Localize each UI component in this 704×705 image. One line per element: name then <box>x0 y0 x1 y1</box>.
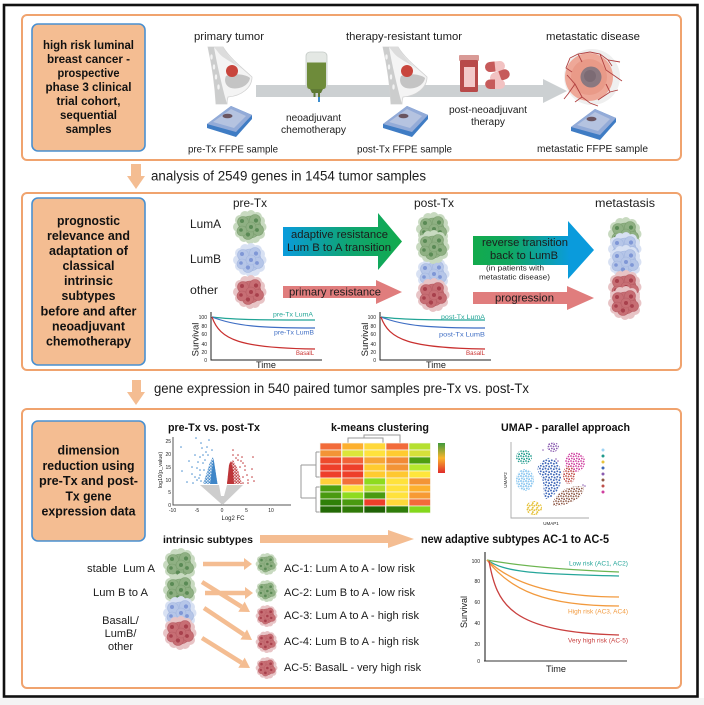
text box: study cohort: high risk luminal <box>43 38 134 52</box>
note: in patients with metastatic disease: metastatic disease) <box>479 272 551 282</box>
chart: UMAP <box>503 442 604 526</box>
arrow: progression: progression <box>495 292 554 304</box>
cell clusters: post-Tx <box>416 212 450 312</box>
chart: pre-Tx survival: Time <box>256 360 276 370</box>
chart: post-Tx survival: 60 <box>370 332 376 338</box>
chart: pre-Tx survival: 40 <box>201 342 207 348</box>
heading: pre-Tx vs. post-Tx: pre-Tx vs. post-Tx <box>168 422 261 434</box>
chart: post-Tx survival: BasalL <box>466 351 486 357</box>
label: neoadjuvant chemotherapy: chemotherapy <box>281 125 346 136</box>
cell clusters: intrinsic subtypes stack <box>163 548 196 650</box>
label: stable Lum A: stable Lum A <box>87 563 156 575</box>
icon: metastatic tumor <box>564 49 622 106</box>
chart: pre-Tx survival: pre-Tx LumA <box>273 312 314 318</box>
text box: dimension reduction: pre-Tx and post- <box>39 474 138 488</box>
text box: study cohort: prospective <box>58 66 120 80</box>
text box: dimension reduction: Tx gene <box>66 490 112 504</box>
chart: adaptive subtype survival: Low risk (AC1, AC2) <box>569 560 628 568</box>
arrow: adaptive resistance: Lum B to A transition <box>287 242 391 254</box>
arrow: adaptive resistance <box>283 213 402 270</box>
text box: study cohort: phase 3 clinical <box>46 80 132 94</box>
arrow: reverse transition: reverse transition <box>482 237 568 249</box>
label: post-Tx FFPE sample: post-Tx FFPE sample <box>357 144 453 156</box>
text box: study cohort: trial cohort, <box>56 94 120 108</box>
label: BasalL/LumB/other: other <box>108 641 133 653</box>
chart: k-means heatmap <box>301 435 445 513</box>
arrow: reverse transition <box>473 221 594 279</box>
text box: prognostic relevance: intrinsic <box>64 274 113 288</box>
arrow: step 2 to step 3 <box>127 380 145 405</box>
chart: volcano plot: -5 <box>195 508 199 514</box>
label: AC-5: AC-5: BasalL - very high risk <box>284 662 421 674</box>
chart: volcano plot: 5 <box>245 508 248 514</box>
text box: study cohort: samples <box>66 122 112 136</box>
icon: metastatic FFPE block <box>571 109 616 140</box>
chart: post-Tx survival: 100 <box>368 315 376 321</box>
arrow: progression <box>473 286 594 310</box>
text box: prognostic relevance: classical <box>62 259 114 273</box>
label: other: other <box>190 283 218 297</box>
text box: study cohort <box>32 24 145 151</box>
arrow: step 1 to step 2 <box>127 164 145 189</box>
chart: volcano plot: 15 <box>165 465 171 471</box>
chart: volcano plot <box>158 437 291 522</box>
chart: pre-Tx survival <box>190 312 322 370</box>
note: in patients with metastatic disease: (in patients with <box>486 264 544 272</box>
text box: prognostic relevance: adaptation of <box>49 244 129 258</box>
icons: adaptive subtype clusters <box>256 553 277 679</box>
chart: UMAP: UMAP1 <box>543 521 559 526</box>
chart: post-Tx survival: Time <box>426 360 446 370</box>
chart: adaptive subtype survival: 0 <box>477 659 480 665</box>
text box: prognostic relevance <box>32 198 145 365</box>
chart: post-Tx survival: 80 <box>370 324 376 330</box>
chart: volcano plot: 5 <box>168 490 171 496</box>
label: metastatic FFPE sample: metastatic FFPE sample <box>537 144 649 155</box>
label: AC-2: AC-2: Lum B to A - low risk <box>284 587 415 599</box>
chart: adaptive subtype survival: 20 <box>474 642 480 648</box>
label: Lum B to A: Lum B to A <box>93 587 149 599</box>
arrow: treatment timeline <box>256 79 567 103</box>
label: BasalL/LumB/other: BasalL/ <box>102 615 140 627</box>
text box: prognostic relevance: subtypes <box>62 289 116 303</box>
chart: UMAP: UMAP2 <box>503 472 508 488</box>
caption: gene expression in paired samples: gene expression in 540 paired tumor samples pre-Tx vs. post-Tx <box>154 381 529 396</box>
label: pre-Tx FFPE sample: pre-Tx FFPE sample <box>188 144 279 156</box>
chart: adaptive subtype survival <box>459 552 628 674</box>
icon: therapy-resistant tumor breast <box>383 47 427 104</box>
arrow: intrinsic to adaptive subtypes <box>260 530 414 548</box>
chart: post-Tx survival: 20 <box>370 350 376 356</box>
heading: metastasis: metastasis <box>595 196 655 210</box>
chart: volcano plot: 0 <box>221 508 224 514</box>
cell clusters: metastasis <box>608 217 642 320</box>
heading: pre-Tx: pre-Tx <box>233 196 267 210</box>
label: BasalL/LumB/other: LumB/ <box>105 628 137 640</box>
arrow: primary resistance: primary resistance <box>289 286 381 298</box>
cell clusters: pre-Tx <box>233 210 266 309</box>
panel: intrinsic subtypes <box>22 193 681 370</box>
icon: pre-Tx FFPE block <box>207 106 252 137</box>
icon: primary tumor breast <box>208 47 252 104</box>
text box: prognostic relevance: neoadjuvant <box>52 320 126 334</box>
chart: pre-Tx survival: BasalL <box>296 351 315 357</box>
label: AC-1: AC-1: Lum A to A - low risk <box>284 563 416 575</box>
chart: adaptive subtype survival: Time <box>546 664 566 674</box>
label: neoadjuvant chemotherapy: neoadjuvant <box>286 113 341 124</box>
label: post-neoadjuvant therapy: post-neoadjuvant <box>449 105 527 116</box>
text box: study cohort: sequential <box>60 108 117 122</box>
arrow: reverse transition: back to LumB <box>490 250 558 262</box>
chart: pre-Tx survival: Survival <box>190 323 202 356</box>
chart: volcano plot: 10 <box>268 508 274 514</box>
chart: volcano plot: -10 <box>169 508 176 514</box>
heading: UMAP - parallel approach: UMAP - parallel approach <box>501 422 630 434</box>
chart: adaptive subtype survival: 80 <box>474 579 480 585</box>
text box: dimension reduction: dimension <box>58 444 120 458</box>
icon: post-Tx FFPE block <box>383 106 428 137</box>
caption: analysis of genes: analysis of 2549 genes in 1454 tumor samples <box>151 168 426 184</box>
heading: new adaptive subtypes: new adaptive subtypes AC-1 to AC-5 <box>421 534 610 546</box>
chart: pre-Tx survival: 100 <box>199 315 207 321</box>
arrows: subtype mapping <box>202 558 253 668</box>
text box: dimension reduction: reduction using <box>42 459 134 473</box>
chart: volcano plot: 20 <box>165 452 171 458</box>
label: therapy-resistant tumor: therapy-resistant tumor <box>346 31 462 43</box>
chart: post-Tx survival: post-Tx LumB <box>439 332 485 338</box>
chart: adaptive subtype survival: High risk (AC3, AC4) <box>568 608 628 616</box>
icon: chemotherapy IV bag <box>306 52 327 102</box>
text box: study cohort: breast cancer - <box>47 52 130 66</box>
label: LumA: LumA <box>190 217 221 231</box>
chart: adaptive subtype survival: Very high risk (AC-5) <box>568 638 628 644</box>
chart: adaptive subtype survival: Survival <box>459 596 469 628</box>
chart: volcano plot: 25 <box>165 439 171 445</box>
chart: adaptive subtype survival: 60 <box>474 600 480 606</box>
chart: post-Tx survival: 0 <box>373 358 376 364</box>
text box: prognostic relevance: chemotherapy <box>46 334 131 348</box>
label: metastatic disease: metastatic disease <box>546 31 640 43</box>
chart: pre-Tx survival: 80 <box>201 324 207 330</box>
chart: pre-Tx survival: pre-Tx LumB <box>274 330 314 336</box>
label: neoadjuvant chemotherapy <box>281 113 346 136</box>
chart: pre-Tx survival: 0 <box>204 358 207 364</box>
icon: medication bottle and pills <box>459 55 511 92</box>
text box: dimension reduction: expression data <box>42 504 137 518</box>
text box: prognostic relevance: relevance and <box>47 229 130 243</box>
label: post-neoadjuvant therapy: therapy <box>471 117 505 128</box>
arrow: primary resistance <box>283 280 402 304</box>
panel: dimension reduction <box>22 409 681 688</box>
text box: dimension reduction <box>32 421 145 541</box>
label: post-neoadjuvant therapy <box>449 105 527 128</box>
chart: adaptive subtype survival: 100 <box>472 559 480 565</box>
arrow: adaptive resistance: adaptive resistance <box>291 229 388 241</box>
label: LumB: LumB <box>190 252 221 266</box>
label: BasalL/LumB/other <box>102 615 140 653</box>
chart: post-Tx survival <box>360 312 491 370</box>
note: in patients with metastatic disease <box>479 264 551 282</box>
chart: volcano plot: 10 <box>165 478 171 484</box>
chart: pre-Tx survival: 60 <box>201 332 207 338</box>
panel: study design <box>22 15 681 160</box>
heading: intrinsic subtypes: intrinsic subtypes <box>163 534 253 546</box>
heading: k-means clustering: k-means clustering <box>331 422 429 434</box>
label: AC-4: AC-4: Lum B to A - high risk <box>284 636 419 648</box>
chart: volcano plot: Log2 FC <box>221 516 245 522</box>
chart: post-Tx survival: 40 <box>370 342 376 348</box>
chart: volcano plot: log10(p_value) <box>158 452 164 488</box>
text box: prognostic relevance: prognostic <box>57 214 120 228</box>
chart: volcano plot: 0 <box>168 503 171 509</box>
heading: post-Tx: post-Tx <box>414 196 454 210</box>
text box: prognostic relevance: before and after <box>40 304 137 318</box>
label: AC-3: AC-3: Lum A to A - high risk <box>284 610 419 622</box>
chart: adaptive subtype survival: 40 <box>474 621 480 627</box>
chart: post-Tx survival: post-Tx LumA <box>441 314 486 321</box>
chart: post-Tx survival: Survival <box>360 323 371 356</box>
chart: pre-Tx survival: 20 <box>201 350 207 356</box>
label: primary tumor: primary tumor <box>194 31 264 43</box>
